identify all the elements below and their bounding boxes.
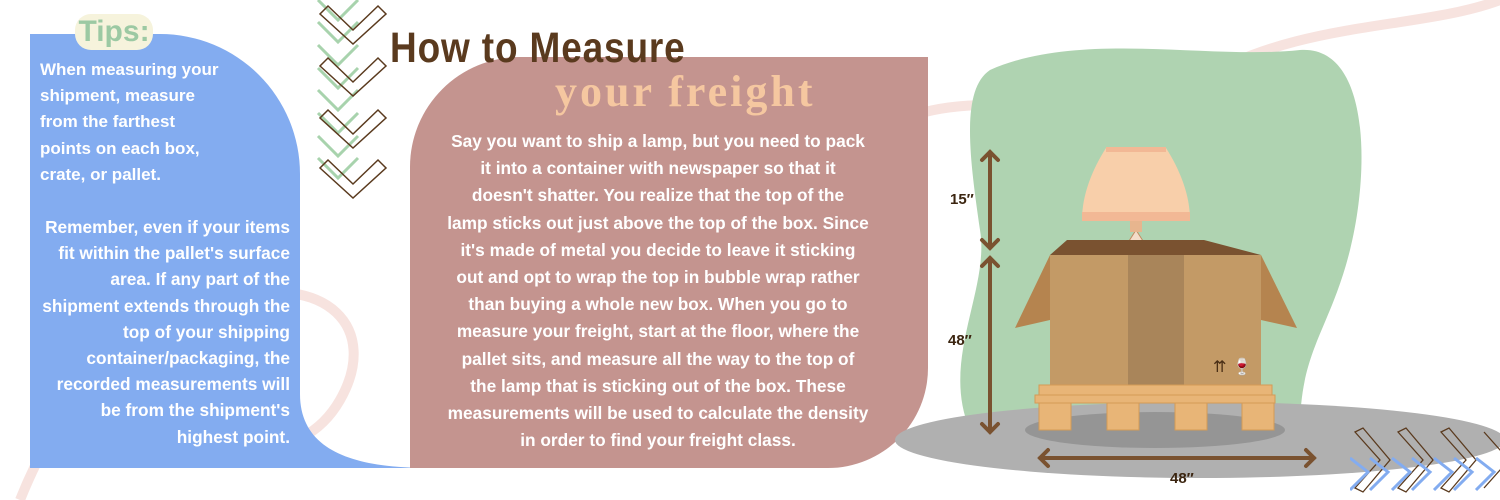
icon: chevron column bbox=[317, 0, 387, 199]
tips text block 2: recorded measurements will bbox=[57, 374, 290, 394]
tips text block 1: shipment, measure bbox=[40, 86, 195, 105]
tips text block 1: from the farthest bbox=[40, 112, 175, 131]
pallet bbox=[1035, 385, 1275, 430]
tips text block 2 bbox=[42, 217, 290, 447]
freight body text: measure your freight, start at the floor, where the bbox=[457, 321, 859, 341]
freight body text bbox=[447, 131, 869, 450]
freight body text: pallet sits, and measure all the way to the top of bbox=[462, 349, 854, 369]
tips text block 2: top of your shipping bbox=[123, 322, 290, 342]
box: 🍷 bbox=[1232, 357, 1252, 376]
tips text block 2: shipment extends through the bbox=[42, 296, 290, 316]
panel: tips bbox=[30, 14, 410, 468]
freight body text: measurements will be used to calculate the density bbox=[448, 403, 868, 423]
tips text block 2: fit within the pallet's surface bbox=[58, 243, 290, 263]
arrows bbox=[982, 152, 1314, 466]
title: How to Measure bbox=[390, 24, 686, 72]
illustration: lamp in box on pallet: 48″ bbox=[948, 332, 972, 349]
tips text block 1: points on each box, bbox=[40, 139, 200, 158]
panel: freight text bbox=[410, 57, 928, 468]
freight body text: it into a container with newspaper so that it bbox=[480, 158, 836, 178]
freight body text: doesn't shatter. You realize that the top of the bbox=[472, 185, 844, 205]
tips text block 2: be from the shipment's bbox=[101, 400, 290, 420]
freight body text: it's made of metal you decide to leave it sticking bbox=[460, 240, 855, 260]
tips label: Tips: bbox=[78, 15, 150, 48]
illustration: lamp in box on pallet bbox=[895, 48, 1500, 487]
illustration: lamp in box on pallet: 15″ bbox=[950, 191, 974, 208]
tips text block 1: When measuring your bbox=[40, 60, 219, 79]
tips text block 2: container/packaging, the bbox=[86, 348, 290, 368]
subtitle: your freight bbox=[555, 67, 815, 116]
lamp bbox=[1082, 147, 1190, 255]
freight body text: lamp sticks out just above the top of the box. Since bbox=[447, 213, 869, 233]
icon: bottom-right chevrons bbox=[1350, 427, 1500, 493]
tips text block 1 bbox=[40, 60, 219, 184]
freight body text: Say you want to ship a lamp, but you need to pack bbox=[451, 131, 865, 151]
freight body text: than buying a whole new box. When you go to bbox=[468, 294, 848, 314]
freight body text: the lamp that is sticking out of the box. These bbox=[470, 376, 846, 396]
tips text block 2: highest point. bbox=[177, 427, 290, 447]
box: ⇈ bbox=[1213, 357, 1226, 376]
tips text block 2: area. If any part of the bbox=[110, 269, 290, 289]
tips text block 2: Remember, even if your items bbox=[45, 217, 290, 237]
tips text block 1: crate, or pallet. bbox=[40, 165, 161, 184]
box bbox=[1015, 240, 1297, 385]
illustration: lamp in box on pallet: 48″ bbox=[1170, 470, 1194, 487]
freight body text: in order to find your freight class. bbox=[520, 430, 796, 450]
freight body text: out and opt to wrap the top in bubble wrap rather bbox=[456, 267, 860, 287]
